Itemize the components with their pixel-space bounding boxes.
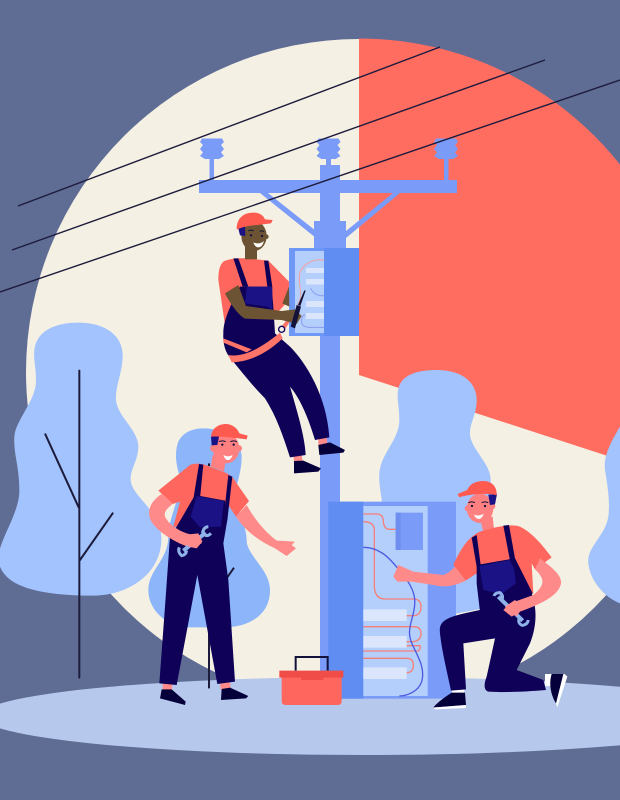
socks (293, 437, 327, 462)
face (467, 494, 493, 523)
meter box (396, 513, 423, 550)
ground ellipse (0, 677, 620, 755)
sole (433, 705, 466, 709)
overalls (223, 287, 329, 457)
harness (223, 320, 289, 362)
sock front (452, 688, 464, 694)
lower electrical cabinet (328, 502, 456, 699)
cabinet body (328, 502, 456, 699)
kneeling worker (393, 481, 567, 709)
shirt (158, 464, 249, 527)
tree trunk (209, 463, 234, 688)
cabinet door (328, 502, 363, 699)
panel wires (297, 260, 324, 327)
utility pole (199, 138, 458, 697)
hair (488, 494, 497, 505)
arm (225, 285, 302, 324)
background cream circle (26, 39, 620, 705)
power lines (0, 47, 620, 292)
far arm (282, 287, 289, 307)
shoe back sole (556, 674, 567, 707)
box body (289, 248, 359, 336)
overalls (159, 495, 235, 685)
standing worker (149, 424, 296, 705)
ear (264, 234, 269, 239)
cabinet inner panel (363, 506, 428, 696)
breaker bars (363, 609, 407, 679)
overall straps (472, 525, 533, 594)
hair (238, 226, 245, 236)
face (241, 221, 267, 251)
left arm (149, 494, 202, 547)
bib pocket (245, 287, 272, 310)
shoes (294, 442, 345, 473)
neck (211, 455, 226, 472)
tree: behind standing worker (148, 428, 270, 688)
box inner panel (295, 251, 324, 333)
neck (480, 517, 494, 532)
tree: behind junction box (379, 370, 493, 617)
hair (211, 435, 219, 445)
wrench (179, 527, 211, 556)
cap (211, 424, 248, 439)
sock back (545, 674, 552, 686)
worker on pole (218, 213, 345, 473)
bib pocket (191, 496, 224, 527)
right arm (503, 558, 561, 617)
tree: left large (0, 323, 161, 678)
insulators (200, 138, 458, 181)
cross arm (199, 180, 457, 193)
blue wire (363, 547, 423, 696)
shirt (453, 525, 552, 610)
pole shaft (320, 165, 340, 697)
eyes and smile (468, 502, 488, 519)
tree trunk and branches (45, 371, 113, 678)
eyes and smile (248, 230, 264, 247)
toolbox handle (296, 657, 328, 671)
toolbox lid (279, 671, 343, 680)
bib pocket (479, 559, 516, 594)
ears (465, 503, 495, 511)
socks (163, 682, 231, 690)
cap (458, 481, 497, 497)
left arm (393, 565, 466, 586)
eyes and smile (219, 441, 237, 460)
pole collar (314, 221, 346, 251)
overall straps (233, 258, 272, 287)
wrench (494, 593, 528, 625)
toolbox (279, 657, 343, 705)
red wedge on circle (359, 38, 620, 460)
upper electrical box (289, 248, 359, 336)
screwdriver (291, 290, 306, 328)
right arm (236, 505, 296, 556)
toolbox body (282, 677, 342, 705)
red wires (363, 514, 421, 673)
tree: right edge (588, 427, 620, 607)
overalls (440, 600, 546, 692)
hand (183, 533, 202, 548)
ears (210, 445, 242, 452)
box door (324, 248, 359, 336)
shoes (160, 688, 248, 705)
harness ring (279, 326, 285, 332)
overall straps (190, 464, 232, 520)
hand (505, 600, 523, 616)
bib (477, 558, 533, 612)
shoe front (433, 693, 466, 707)
diagonal braces (260, 193, 400, 238)
cap (237, 213, 273, 229)
neck (245, 245, 257, 259)
face (213, 433, 239, 463)
panel bars (306, 268, 324, 319)
shoe back (550, 674, 563, 703)
shirt (218, 258, 289, 337)
